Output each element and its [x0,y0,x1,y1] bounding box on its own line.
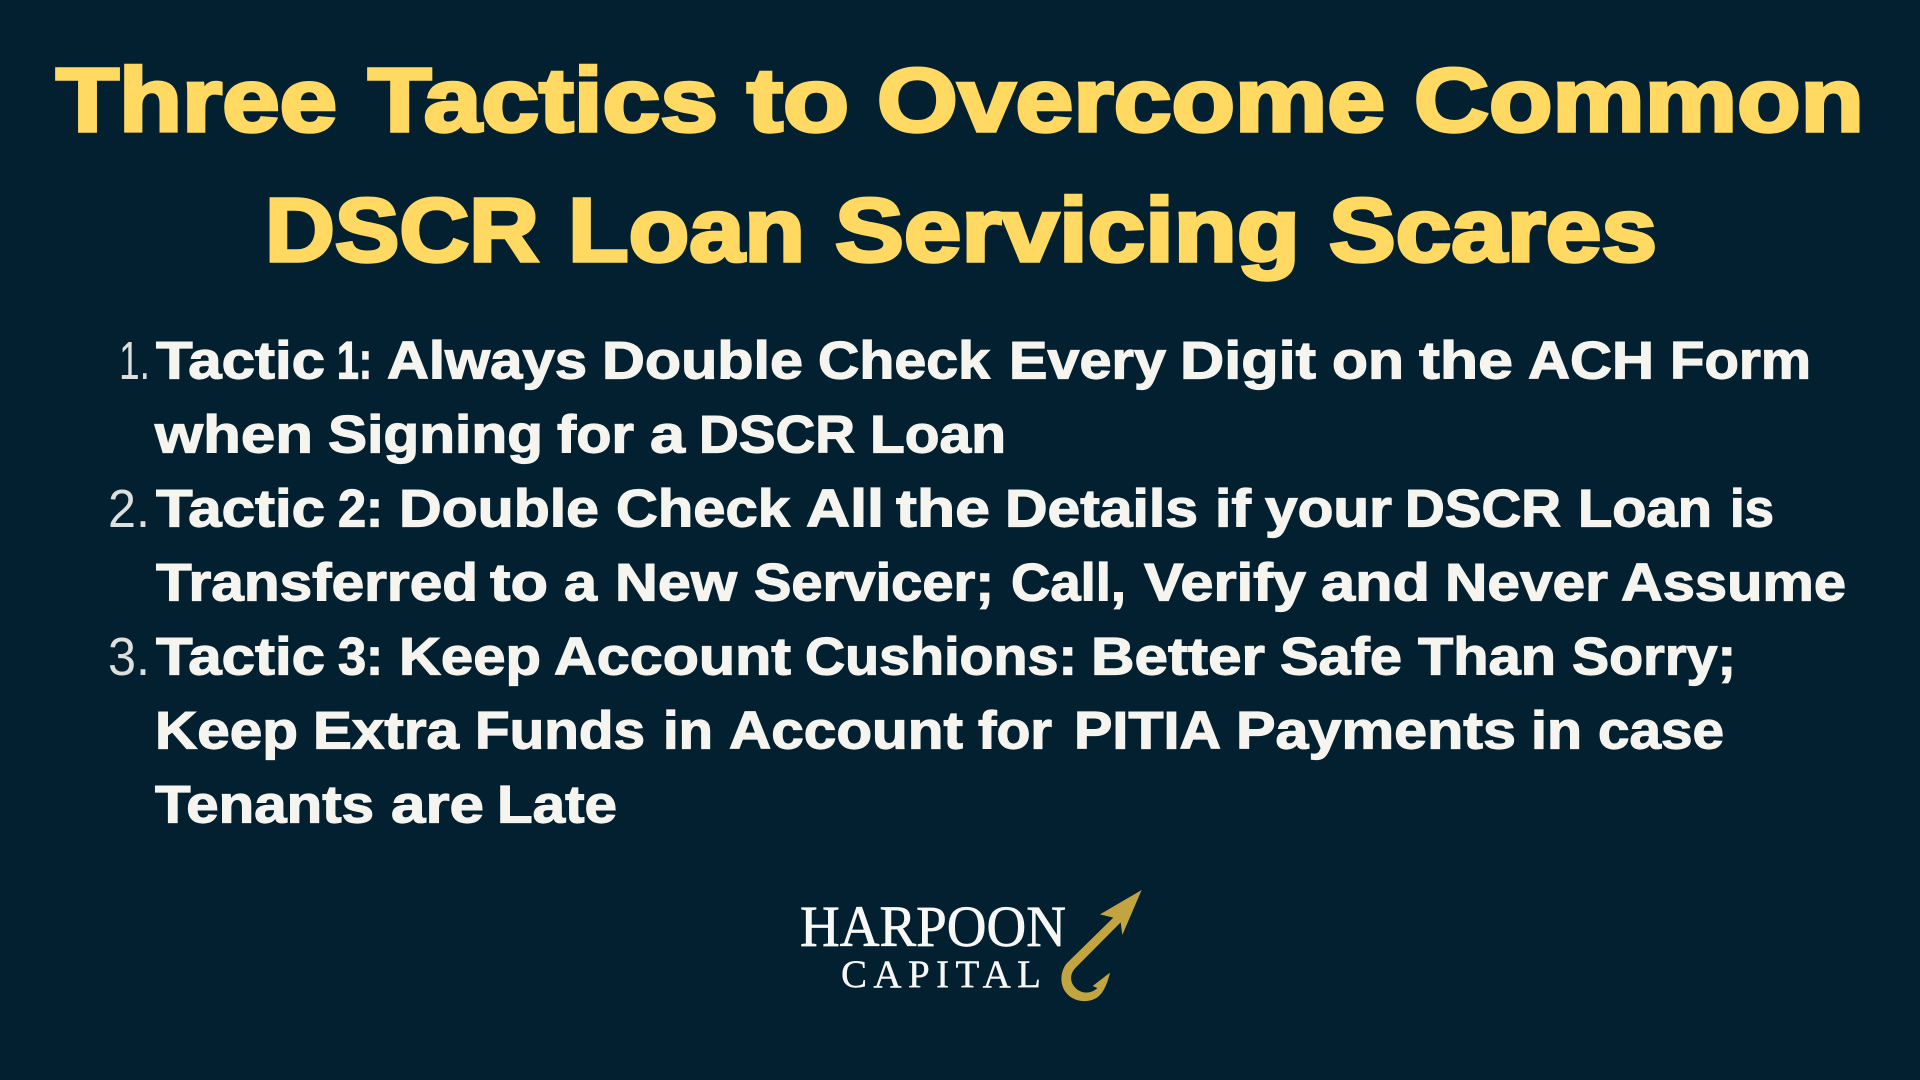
title: DSCR [265,181,539,281]
tactic 3: Tactic [156,628,325,687]
title: Scares [1329,181,1657,281]
tactic 1: on [1332,332,1404,391]
tactic 1 [119,331,1811,465]
tactic 2: Details [1005,480,1198,539]
icon: gold harpoon hook [1061,890,1142,1001]
tactic 2: to [490,554,548,613]
tactic 2: New [615,554,737,613]
tactic 3: Funds [475,702,645,761]
tactic 2: a [564,554,598,613]
tactic 2: Double [399,480,599,539]
tactic 3: Cushions: [805,628,1077,687]
tactic 2: and [1321,554,1430,613]
tactic 1: Signing [328,406,543,465]
tactic 2: your [1265,480,1392,539]
tactic 3 [108,627,1736,835]
tactic 3: Keep [155,702,298,761]
title: to [747,51,849,151]
tactic 3: 3. [108,627,150,687]
tactic 1: for [557,406,634,465]
numbered list of tactics [108,331,1846,835]
tactic 3: Payments [1236,702,1516,761]
tactic 3: case [1598,702,1724,761]
tactic 2: 2. [108,479,150,539]
tactic 1: Always [387,332,587,391]
tactic 3: Than [1418,628,1556,687]
tactic 3: Keep [399,628,541,687]
title: Three [56,51,337,151]
tactic 2: if [1215,480,1252,539]
tactic 2: DSCR [1405,480,1561,539]
tactic 2 [108,479,1846,613]
tactic 1: Double [602,332,803,391]
tactic 1: a [650,406,686,465]
tactic 1: ACH [1528,332,1654,391]
tactic 3: Sorry; [1572,628,1736,687]
tactic 3: are [391,776,484,835]
logo wordmark [800,894,1066,996]
tactic 1: Every [1009,332,1166,391]
tactic 3: Tenants [155,776,374,835]
tactic 3: Account [729,702,963,761]
tactic 1: Tactic [156,332,325,391]
tactic 2: Check [616,480,791,539]
tactic 2: the [896,480,990,539]
title: Servicing [835,181,1300,281]
tactic 2: is [1730,480,1774,539]
tactic 2: Never [1445,554,1608,613]
tactic 3: Better [1091,628,1265,687]
tactic 3: Account [554,628,791,687]
title: Tactics [368,51,718,151]
logo: Harpoon Capital [800,890,1142,1001]
tactic 3: Late [497,776,617,835]
tactic 3: PITIA [1074,702,1221,761]
tactic 2: Loan [1578,480,1712,539]
tactic 1: the [1419,332,1513,391]
tactic 3: 3: [338,628,383,687]
title: Common [1414,51,1864,151]
tactic 1: 1. [119,331,150,391]
tactic 2: Servicer; [754,554,994,613]
tactic 2: Call, [1011,554,1126,613]
tactic 1: 1: [337,332,372,391]
tactic 2: Verify [1144,554,1306,613]
tactic 3: in [1531,702,1582,761]
tactic 3: Extra [313,702,460,761]
tactic 1: Digit [1180,332,1316,391]
title [56,51,1864,281]
tactic 3: for [978,702,1052,761]
title: Overcome [877,51,1385,151]
tactic 2: Transferred [156,554,478,613]
tactic 3: in [663,702,713,761]
tactic 2: Tactic [156,480,325,539]
tactic 1: Check [818,332,991,391]
tactic 1: Form [1670,332,1811,391]
tactic 2: Assume [1621,554,1846,613]
tactic 2: 2: [338,480,383,539]
logo wordmark: HARPOON [800,894,1066,959]
tactic 1: DSCR [699,406,855,465]
title: Loan [568,181,805,281]
logo wordmark: CAPITAL [841,953,1041,996]
tactic 3: Safe [1280,628,1402,687]
tactic 1: Loan [870,406,1006,465]
tactic 1: when [154,406,313,465]
tactic 2: All [806,480,884,539]
